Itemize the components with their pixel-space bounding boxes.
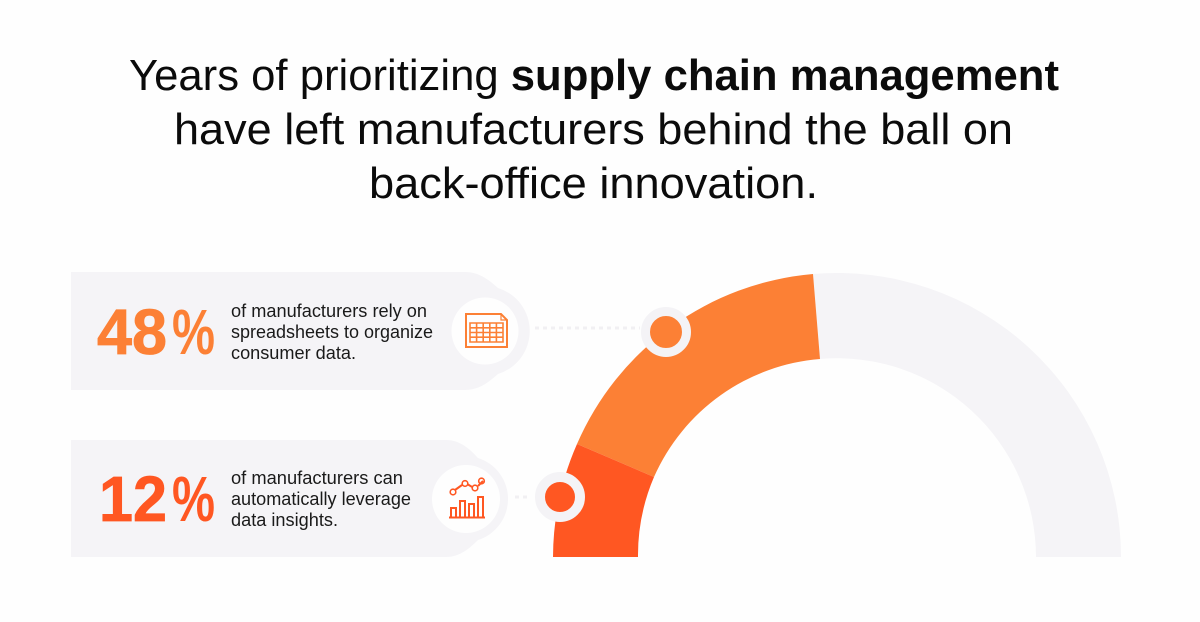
gauge segment: 12%	[553, 444, 654, 557]
48% description: consumer data.	[231, 343, 356, 363]
title: have left manufacturers behind the ball on	[174, 105, 1013, 154]
48% description: of manufacturers rely on	[231, 301, 427, 321]
48% figure: 48	[97, 296, 167, 368]
12% figure: 12	[99, 463, 167, 535]
icon: bar and line chart	[432, 465, 500, 533]
connector: 48%	[535, 326, 640, 330]
gauge: semicircle	[553, 273, 1121, 557]
panel: 48% stat	[71, 272, 530, 390]
connector: 12%	[515, 496, 531, 498]
12% description	[231, 468, 411, 530]
12% figure	[99, 463, 215, 535]
12% description: automatically leverage	[231, 489, 411, 509]
icon: spreadsheet	[452, 298, 518, 364]
48% description: spreadsheets to organize	[231, 322, 433, 342]
gauge segment: 48%	[577, 274, 820, 477]
title	[129, 51, 1059, 208]
title: back-office innovation.	[369, 159, 818, 208]
marker: 12%	[540, 477, 580, 517]
12% figure: %	[172, 463, 215, 535]
gauge remainder	[813, 273, 1121, 557]
marker: 48%	[646, 312, 686, 352]
48% description	[231, 301, 433, 363]
12% description: of manufacturers can	[231, 468, 403, 488]
48% figure: %	[172, 296, 215, 368]
48% figure	[97, 296, 215, 368]
12% description: data insights.	[231, 510, 338, 530]
panel: 12% stat	[71, 440, 508, 557]
title: Years of prioritizing supply chain management	[129, 51, 1059, 100]
